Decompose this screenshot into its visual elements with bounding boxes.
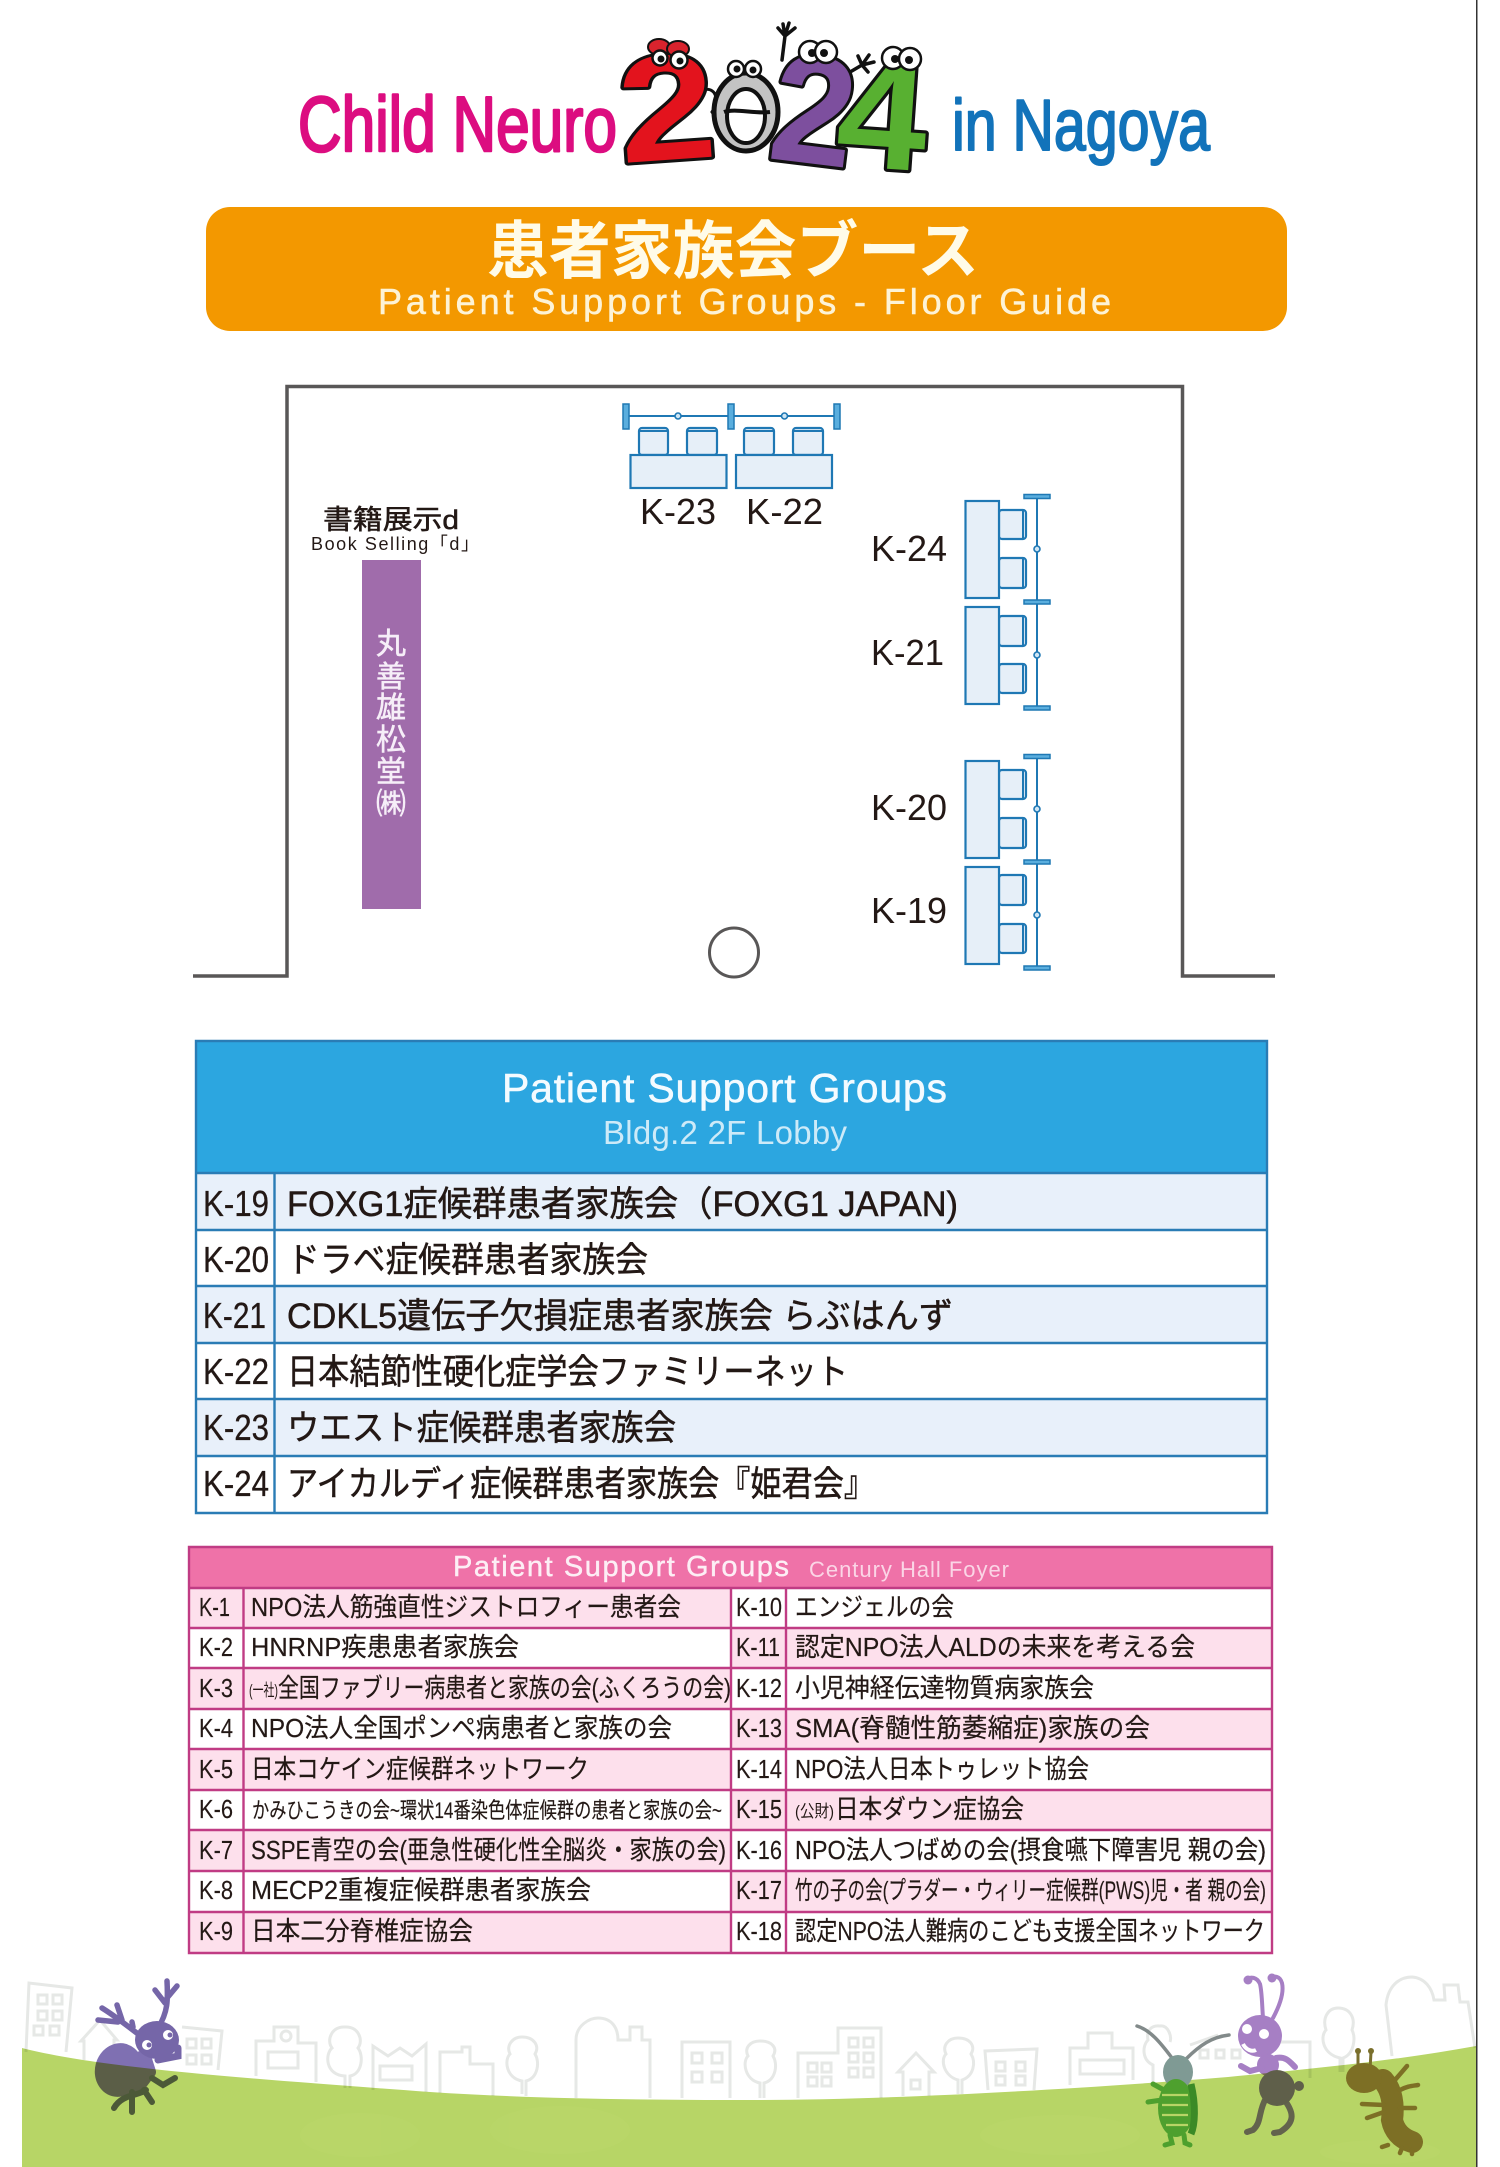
beetle character (89, 1981, 179, 2112)
row K-18: 認定NPO法人難病のこども支援全国ネットワーク (795, 1916, 1265, 1946)
row K-15: K-15 (736, 1794, 782, 1824)
row K-18: K-18 (736, 1916, 782, 1946)
booths K-20 and K-19 (871, 754, 1050, 970)
ant body upper part (1238, 1974, 1295, 2076)
row K-15: 日本ダウン症協会 (835, 1794, 1024, 1824)
title banner (206, 207, 1287, 331)
row K-17: 竹の子の会(プラダー・ウィリー症候群(PWS)児・者 親の会) (795, 1877, 1266, 1905)
banner background (206, 207, 1287, 331)
table grid (189, 1547, 1272, 1953)
row K-6 (199, 1794, 722, 1824)
row K-1: K-1 (199, 1592, 230, 1622)
row K-1: NPO法人筋強直性ジストロフィー患者会 (251, 1592, 681, 1622)
numeral: gray 0 (714, 61, 778, 151)
row K-24: K-24 (203, 1463, 269, 1504)
town skyline outlines (26, 1977, 1475, 2098)
grasshopper character (1137, 2026, 1229, 2145)
logo text: in Nagoya: in Nagoya (952, 86, 1211, 166)
book exhibit booth: Maruzen Yushodo: 丸善雄松堂㈱ (376, 628, 406, 821)
logo text: Child Neuro: Child Neuro (298, 80, 617, 168)
numeral: purple 2 with waving hands: 2 (762, 20, 866, 201)
numeral: green 4: 4 (832, 24, 934, 205)
row K-20: K-20 (203, 1239, 269, 1280)
row K-21: CDKL5遺伝子欠損症患者家族会 らぶはんず (287, 1297, 953, 1336)
row K-8: MECP2重複症候群患者家族会 (251, 1875, 591, 1905)
label: K-20: K-20 (871, 787, 947, 828)
hill texture (300, 2106, 1440, 2164)
booths K-24 and K-21 (871, 494, 1050, 710)
label: K-19: K-19 (871, 890, 947, 931)
row K-12: 小児神経伝達物質病家族会 (795, 1673, 1094, 1703)
row K-23: ウエスト症候群患者家族会 (287, 1409, 676, 1448)
row K-13: SMA(脊髄性筋萎縮症)家族の会 (795, 1713, 1150, 1743)
row K-22: K-22 (203, 1351, 269, 1392)
row K-12: K-12 (736, 1673, 782, 1703)
row K-10 (736, 1592, 954, 1622)
label: K-22: K-22 (746, 491, 823, 532)
row K-8: K-8 (199, 1875, 233, 1905)
table header: Century Hall Foyer (809, 1557, 1009, 1582)
row K-17: K-17 (736, 1875, 782, 1905)
label: K-24: K-24 (871, 528, 947, 569)
table header: Patient Support Groups (453, 1551, 789, 1583)
row K-16: NPO法人つばめの会(摂食嚥下障害児 親の会) (795, 1835, 1266, 1865)
numeral: red 2: 2 (613, 22, 721, 195)
row K-4: K-4 (199, 1713, 233, 1743)
row K-22: 日本結節性硬化症学会ファミリーネット (287, 1353, 848, 1392)
row K-7: K-7 (199, 1835, 233, 1865)
row K-21: K-21 (203, 1295, 266, 1336)
row K-13: K-13 (736, 1713, 782, 1743)
row K-10: エンジェルの会 (795, 1592, 954, 1622)
row K-15 (736, 1794, 1024, 1824)
row K-7: SSPE青空の会(亜急性硬化性全脳炎・家族の会) (251, 1835, 726, 1865)
row K-14: K-14 (736, 1754, 782, 1784)
row K-19: K-19 (203, 1183, 269, 1224)
row K-24: アイカルディ症候群患者家族会『姫君会』 (287, 1465, 875, 1504)
booths K-23 and K-22 (623, 404, 840, 532)
row K-23: K-23 (203, 1407, 269, 1448)
row shading (189, 1588, 1272, 1953)
row K-11: 認定NPO法人ALDの未来を考える会 (795, 1632, 1195, 1662)
row K-19: FOXG1症候群患者家族会（FOXG1 JAPAN) (287, 1185, 958, 1224)
row K-20: ドラベ症候群患者家族会 (287, 1241, 648, 1280)
label: K-21: K-21 (871, 632, 944, 673)
row K-2: HNRNP疾患患者家族会 (251, 1632, 519, 1662)
book exhibit label: Book Selling「d」 (311, 534, 479, 554)
row K-3: 全国ファブリー病患者と家族の会(ふくろうの会) (278, 1673, 731, 1703)
subtitle: English: Patient Support Groups - Floor Guide (378, 281, 1111, 322)
table grid (196, 1041, 1267, 1513)
logo: Child Neuro 2024 in Nagoya (298, 20, 1211, 205)
row K-14: NPO法人日本トゥレット協会 (795, 1754, 1089, 1784)
table rows (199, 1592, 1266, 1946)
book exhibit booth: Maruzen Yushodo (362, 560, 421, 909)
label: K-23: K-23 (640, 491, 716, 532)
row K-5: 日本コケイン症候群ネットワーク (251, 1754, 589, 1784)
pillar (710, 928, 758, 977)
row K-11: K-11 (736, 1632, 780, 1662)
floor plan (193, 386, 1275, 977)
row K-9: 日本二分脊椎症協会 (251, 1916, 473, 1946)
book exhibit label (311, 505, 479, 554)
ant lower body (1247, 2070, 1304, 2133)
green hill (22, 2046, 1476, 2167)
table header: Bldg.2 2F Lobby (603, 1114, 848, 1151)
row K-17 (736, 1875, 1266, 1905)
row K-15: (公財) (795, 1802, 834, 1821)
row K-9: K-9 (199, 1916, 233, 1946)
row K-6: かみひこうきの会~環状14番染色体症候群の患者と家族の会~ (252, 1798, 722, 1823)
row shading (196, 1173, 1267, 1456)
row K-3: (一社) (249, 1681, 278, 1700)
logo numerals: 2024 characters (613, 20, 934, 205)
row K-3: K-3 (199, 1673, 233, 1703)
title: Japanese: 患者家族会ブース (487, 217, 979, 287)
table header (196, 1041, 1267, 1173)
table: Patient Support Groups, Bldg.2 2F Lobby (196, 1041, 1267, 1513)
row K-2: K-2 (199, 1632, 233, 1662)
row K-5: K-5 (199, 1754, 233, 1784)
hall walls (193, 386, 1275, 976)
page edge line (1476, 0, 1478, 2167)
row K-10: K-10 (736, 1592, 782, 1622)
book exhibit label: 書籍展示d (323, 505, 459, 535)
row K-6: K-6 (199, 1794, 233, 1824)
row K-4: NPO法人全国ポンペ病患者と家族の会 (251, 1713, 672, 1743)
caterpillar character (1346, 2048, 1418, 2154)
table header: Patient Support Groups (502, 1065, 947, 1111)
table: Patient Support Groups, Century Hall Foyer (189, 1547, 1272, 1953)
row K-16: K-16 (736, 1835, 782, 1865)
footer illustration: town, hill and insect characters (22, 1974, 1476, 2167)
table header (189, 1547, 1272, 1588)
